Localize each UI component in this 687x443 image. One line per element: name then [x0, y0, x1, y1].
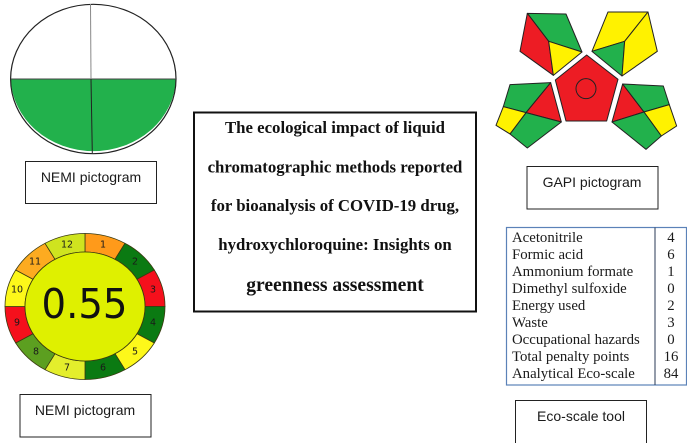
segment numbers: 5: [132, 346, 138, 358]
Eco-scale table: 3: [667, 315, 675, 331]
Eco-scale table: 1: [667, 264, 675, 280]
title panel: for bioanalysis of COVID-19 drug,: [211, 196, 459, 215]
segment numbers: 10: [11, 284, 23, 296]
label: GAPI pictogram: GAPI pictogram: [543, 174, 641, 190]
title panel: chromatographic methods reported: [208, 158, 463, 176]
Eco-scale table: 16: [664, 349, 678, 365]
GAPI central pentagon: [555, 55, 618, 121]
segment numbers: 7: [64, 362, 70, 374]
NEMI pictogram circle: [11, 4, 176, 154]
Eco-scale table: Energy used: [512, 298, 586, 314]
Eco-scale table: 0: [667, 281, 675, 297]
label: NEMI pictogram (top): NEMI pictogram: [41, 169, 141, 185]
title panel: [194, 112, 476, 312]
title panel: greenness assessment: [246, 275, 424, 296]
segment numbers: 3: [150, 284, 156, 296]
GAPI top-right pentagon: [592, 12, 657, 76]
label: NEMI pictogram (top): [26, 162, 156, 204]
wheel centre: [25, 252, 145, 361]
segment numbers: 11: [29, 256, 41, 268]
Eco-scale table: Ammonium formate: [512, 264, 634, 280]
Eco-scale table: Waste: [512, 315, 548, 331]
GAPI top-left pentagon: [520, 13, 582, 75]
segment numbers: 9: [14, 318, 20, 328]
label: NEMI pictogram (bottom): [20, 394, 151, 437]
segment numbers: 2: [132, 256, 138, 268]
Eco-scale table: 84: [664, 366, 679, 382]
Eco-scale table: Occupational hazards: [512, 332, 640, 348]
segment numbers: 4: [150, 318, 156, 328]
Eco-scale table: Acetonitrile: [512, 230, 583, 246]
title panel: The ecological impact of liquid: [225, 118, 446, 137]
segment numbers: 8: [33, 346, 39, 358]
Eco-scale table: 4: [667, 230, 675, 246]
label: Eco-scale tool: [516, 400, 646, 443]
GAPI bottom-right pentagon: [612, 84, 677, 149]
segment numbers: 1: [100, 240, 106, 250]
segment numbers: [11, 240, 156, 374]
segment numbers: 12: [61, 240, 73, 250]
Eco-scale table: [506, 228, 686, 385]
label: GAPI pictogram: [527, 166, 658, 209]
Eco-scale table: 0: [667, 332, 675, 348]
segment numbers: 6: [100, 362, 106, 374]
AGREE-style score wheel: [5, 234, 165, 380]
GAPI bottom-left pentagon: [496, 83, 561, 148]
score: 0.55: [42, 280, 128, 328]
label: Eco-scale tool: Eco-scale tool: [537, 408, 625, 424]
Eco-scale table: Dimethyl sulfoxide: [512, 281, 627, 297]
Eco-scale table: Formic acid: [512, 247, 584, 263]
Eco-scale table: Analytical Eco-scale: [512, 366, 635, 382]
GAPI pictogram: [496, 12, 677, 149]
Eco-scale table: 2: [667, 298, 675, 314]
title panel: hydroxychloroquine: Insights on: [218, 235, 452, 254]
Eco-scale table: 6: [667, 247, 675, 263]
wheel segments: [5, 234, 165, 380]
label: NEMI pictogram (bottom): NEMI pictogram: [35, 402, 135, 418]
Eco-scale table: Total penalty points: [512, 349, 630, 365]
